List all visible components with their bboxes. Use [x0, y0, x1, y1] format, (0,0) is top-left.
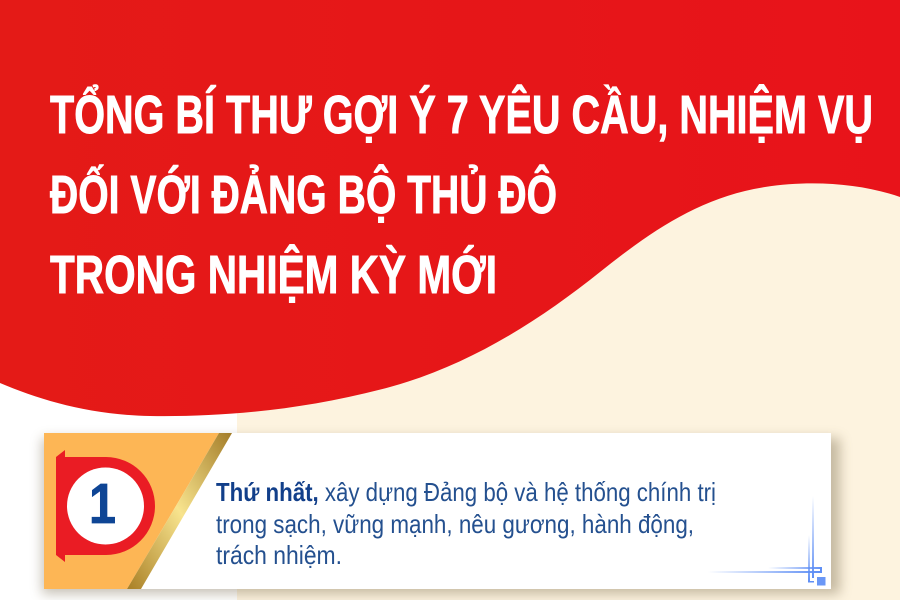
card shadow	[42, 438, 840, 594]
title: ĐỐI VỚI ĐẢNG BỘ THỦ ĐÔ	[50, 164, 557, 225]
requirement text	[216, 477, 716, 570]
orange number block	[44, 433, 219, 589]
panel: first requirement card	[44, 433, 831, 589]
red wave header	[0, 0, 900, 416]
cream background area	[237, 170, 900, 600]
gold diagonal stripe	[127, 433, 232, 589]
number badge	[56, 450, 155, 562]
requirement text: trách nhiệm.	[216, 540, 342, 570]
requirement text: trong sạch, vững mạnh, nêu gương, hành động,	[216, 509, 694, 539]
title: TRONG NHIỆM KỲ MỚI	[50, 244, 497, 305]
red D shape	[56, 457, 155, 555]
white circle	[67, 468, 144, 544]
requirement text: Thứ nhất, xây dựng Đảng bộ và hệ thống chính trị	[216, 477, 716, 507]
card body	[44, 433, 831, 589]
corner ornament	[708, 496, 826, 586]
small red tabs	[56, 450, 65, 457]
title	[50, 84, 873, 305]
number 1: 1	[89, 472, 116, 536]
